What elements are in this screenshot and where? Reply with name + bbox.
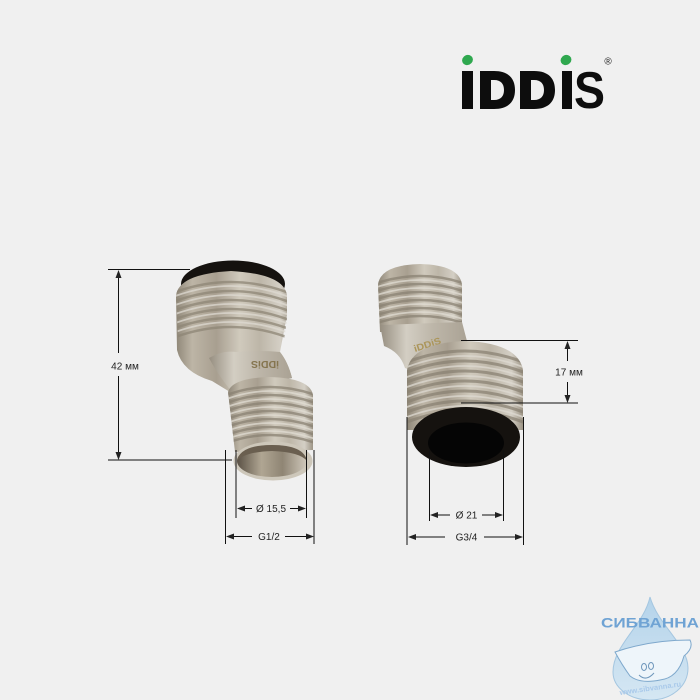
IDDIS logo — [460, 53, 612, 120]
left fitting logo mark: iDDiS — [251, 358, 279, 369]
dimension: diameter 15.5: Ø 15,5 — [256, 504, 286, 515]
Sibvanna watermark logo — [601, 597, 699, 700]
dimension: G3/4 — [407, 417, 524, 545]
dimension: 42 mm — [108, 270, 232, 460]
dimension: G3/4: G3/4 — [456, 532, 478, 544]
dimension: 17 mm: 17 мм — [555, 368, 583, 378]
left fitting — [170, 260, 318, 480]
right fitting black seal — [412, 407, 520, 467]
left fitting black seal — [181, 260, 285, 308]
right fitting large thread — [407, 341, 523, 430]
right fitting neck — [380, 322, 468, 372]
right fitting — [374, 264, 528, 467]
logo wordmark — [462, 62, 605, 120]
left fitting large thread — [170, 282, 292, 339]
dimension: 42 mm: 42 мм — [111, 362, 139, 372]
left fitting small thread — [228, 377, 313, 452]
dimension lines — [108, 270, 583, 545]
right fitting logo mark: iDDiS — [413, 336, 443, 355]
logo wordmark: S — [574, 62, 605, 120]
watermark water drop — [613, 597, 688, 700]
left fitting opening — [234, 442, 312, 480]
watermark bathtub face — [639, 662, 654, 678]
dimension: 17 mm — [461, 340, 583, 403]
right fitting inner opening — [428, 422, 504, 464]
left fitting large body — [176, 271, 292, 392]
dimension: G1/2 — [226, 450, 314, 544]
dimension: diameter 15.5 — [236, 450, 306, 518]
logo green dots — [460, 53, 573, 67]
registered mark: ® — [604, 56, 612, 68]
left fitting neck — [209, 351, 292, 392]
watermark bathtub — [615, 640, 691, 681]
watermark url: www.sibvanna.ru — [618, 679, 682, 697]
dimension: diameter 21 — [430, 450, 504, 522]
dimension: diameter 21: Ø 21 — [456, 510, 478, 522]
watermark brand name: СИБВАННА — [601, 614, 699, 630]
right fitting small thread — [378, 264, 462, 332]
dimension: G1/2: G1/2 — [258, 532, 280, 543]
